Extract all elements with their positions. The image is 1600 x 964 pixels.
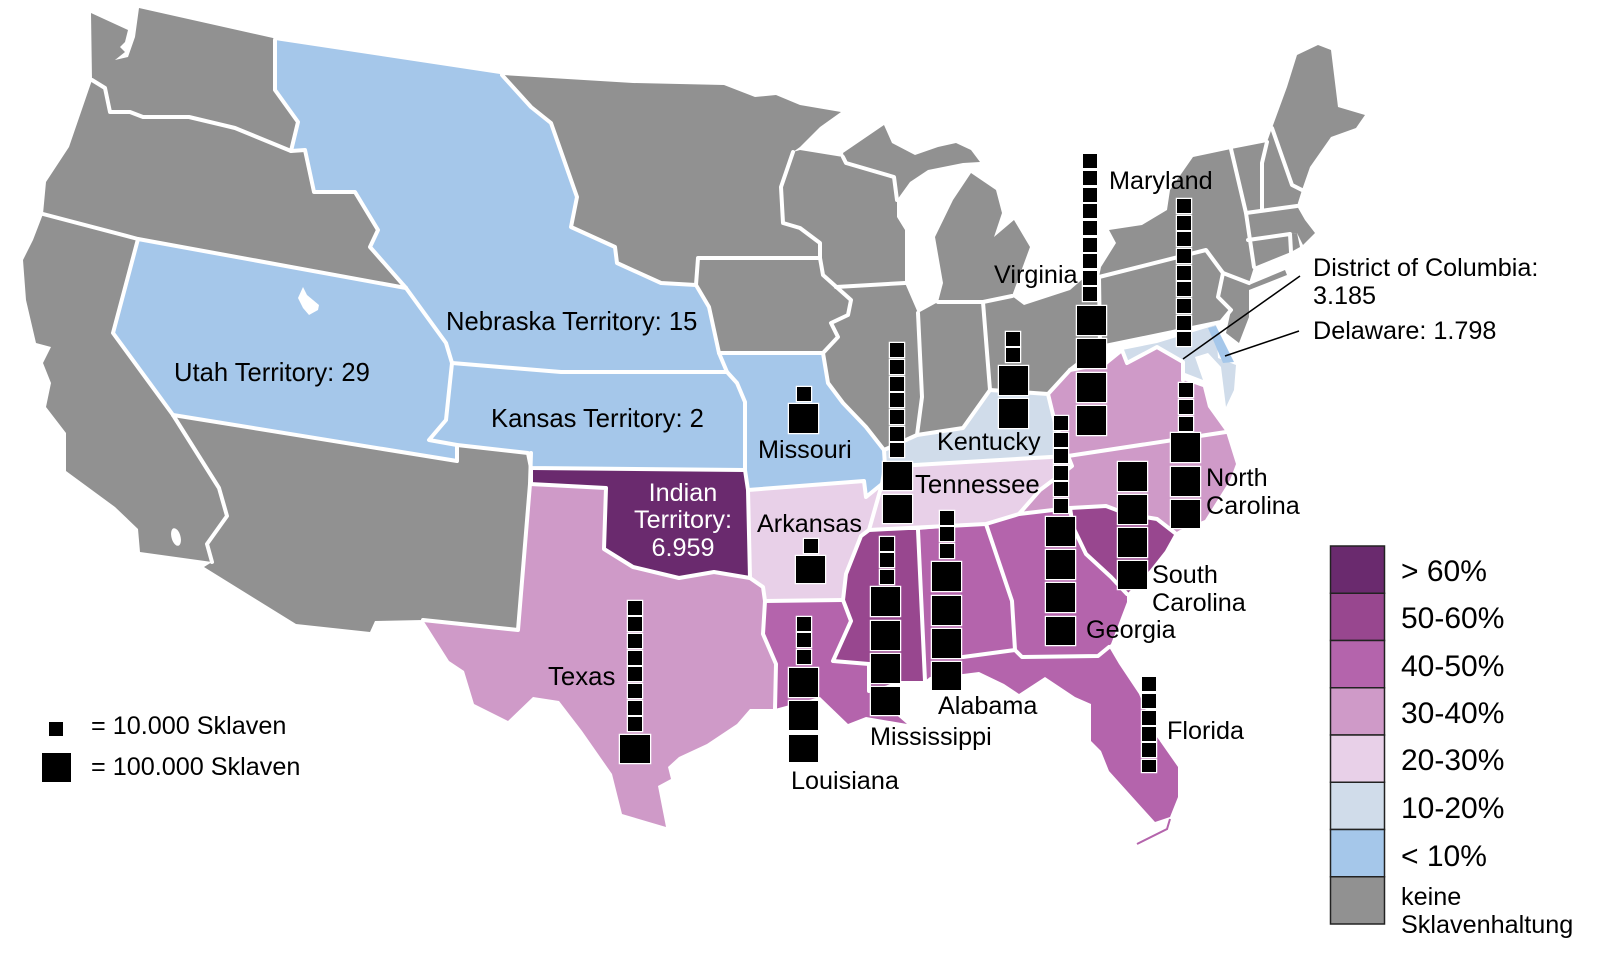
legend labels: > 60% (1401, 555, 1487, 588)
state: Florida (963, 647, 1178, 822)
legend: share of slaves (1330, 546, 1573, 939)
legend labels: < 10% (1401, 840, 1487, 873)
stack: Missouri (789, 387, 818, 433)
Great Salt Lake (298, 287, 319, 315)
legend labels: Sklavenhaltung (1401, 911, 1573, 939)
stack: Texas (620, 601, 650, 763)
state: Georgia (986, 508, 1127, 657)
state: South Carolina (1070, 506, 1175, 594)
legend labels: 50-60% (1401, 602, 1504, 635)
state: Delaware (1208, 326, 1234, 363)
label: Georgia: Georgia (1086, 616, 1177, 644)
stack: South Carolina (1118, 462, 1147, 589)
legend labels: keine (1401, 883, 1461, 911)
stack: Kentucky (999, 332, 1028, 428)
label: Kansas Territory: Kansas Territory: 2 (491, 405, 704, 433)
label: Indian Territory: 6.959 (651, 534, 715, 562)
state: North Carolina (1019, 432, 1236, 533)
stack: Alabama (932, 511, 961, 690)
state: Alabama (918, 524, 1015, 681)
label: District of Columbia: District of Columbia: (1313, 254, 1538, 282)
label: Texas: Texas (548, 663, 615, 691)
stack: North Carolina (1171, 383, 1200, 528)
state: Kansas Territory (429, 363, 745, 470)
leader line: District of Columbia (1183, 276, 1300, 359)
label: South Carolina: Carolina (1152, 589, 1247, 617)
map: states and territories (23, 8, 1365, 844)
map labels (174, 167, 1538, 795)
label: Maryland: Maryland (1109, 167, 1213, 195)
leader line: Delaware (1225, 331, 1299, 356)
label: Tennessee: Tennessee (915, 471, 1040, 499)
stack: Louisiana (789, 617, 818, 762)
gray states: no slavery (23, 8, 1365, 632)
state: Louisiana (763, 600, 907, 724)
legend labels: 10-20% (1401, 792, 1504, 825)
legend labels: 40-50% (1401, 650, 1504, 683)
stack: Florida (1142, 677, 1156, 772)
legend labels: 30-40% (1401, 697, 1504, 730)
unit: 10.000 Sklaven: = 10.000 Sklaven (91, 712, 286, 740)
label: Florida: Florida (1167, 717, 1245, 745)
stack: Georgia (1046, 416, 1075, 645)
state: Indian Territory (533, 470, 750, 578)
Florida Keys (1137, 819, 1170, 844)
stack: Arkansas (796, 539, 825, 583)
label: Virginia: Virginia (994, 261, 1079, 289)
stack: Virginia (1077, 154, 1106, 435)
label: Utah Territory: Utah Territory: 29 (174, 359, 370, 387)
state: Texas (423, 484, 776, 827)
label: Missouri: Missouri (758, 436, 852, 464)
legend: slave count units (42, 712, 300, 782)
label: Mississippi: Mississippi (870, 723, 992, 751)
legend labels (1401, 555, 1573, 939)
label: North Carolina: Carolina (1206, 492, 1301, 520)
swatch column (1330, 546, 1384, 924)
unit: 100.000 Sklaven: = 100.000 Sklaven (91, 753, 300, 781)
state: Utah Territory (113, 239, 457, 461)
state: Mississippi (833, 530, 925, 691)
label: Arkansas: Arkansas (757, 510, 862, 538)
label: North Carolina: North (1206, 464, 1268, 492)
label: Delaware: Delaware: 1.798 (1313, 317, 1496, 345)
state: Arkansas (748, 481, 882, 601)
label: Alabama: Alabama (938, 692, 1038, 720)
state: Nebraska Territory (275, 40, 727, 372)
state: Tennessee (869, 456, 1072, 530)
label: Louisiana: Louisiana (791, 767, 900, 795)
state: Kentucky (884, 390, 1068, 466)
label: Kentucky: Kentucky (937, 428, 1041, 456)
state: Missouri (719, 353, 885, 497)
state: Maryland (1122, 325, 1236, 407)
state: Virginia (1048, 347, 1226, 456)
label: Indian Territory: Indian (649, 479, 717, 507)
white state borders (43, 40, 1302, 709)
stack: Tennessee (883, 343, 912, 523)
slave count stacks (620, 154, 1200, 772)
legend labels: 20-30% (1401, 744, 1504, 777)
stack: Maryland (1177, 199, 1191, 346)
label: South Carolina: South (1152, 561, 1218, 589)
label: Nebraska Territory: Nebraska Territory: 15 (446, 308, 697, 336)
label: Indian Territory: Territory: (634, 506, 732, 534)
label: District of Columbia: 3.185 (1313, 282, 1376, 310)
Santa Catalina island (169, 527, 183, 547)
stack: Mississippi (871, 537, 900, 715)
